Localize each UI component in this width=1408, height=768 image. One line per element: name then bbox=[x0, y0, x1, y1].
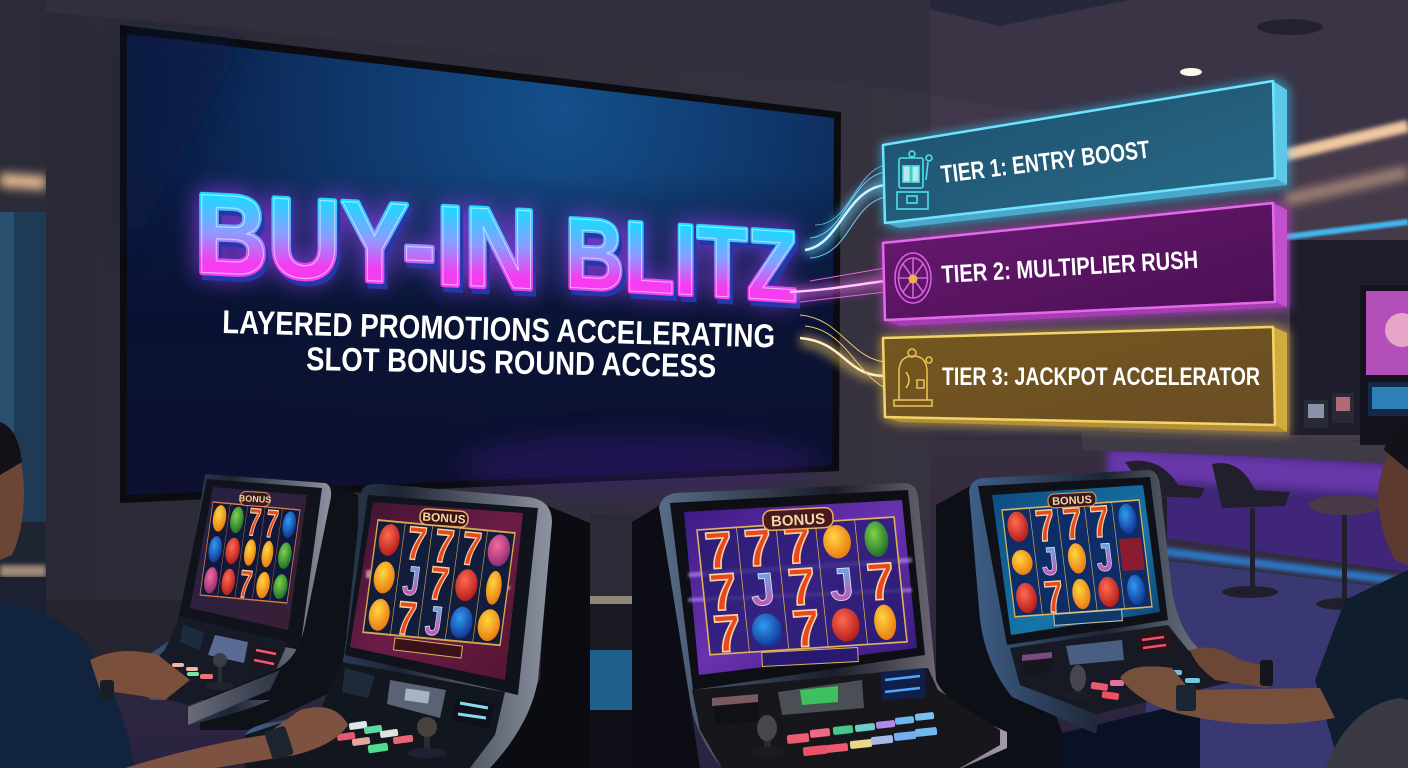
reels 4: J bbox=[1094, 535, 1116, 580]
slot machine 3 bbox=[632, 483, 1007, 768]
title face: BUY-IN bbox=[195, 170, 537, 313]
control panel 2 bbox=[245, 662, 505, 768]
reels 2: 7 bbox=[431, 519, 457, 573]
icon: jackpot machine bbox=[894, 349, 932, 406]
reels 4: 7 bbox=[1042, 572, 1067, 623]
reels 3: J bbox=[748, 564, 777, 616]
icon: wheel bbox=[895, 253, 931, 303]
stream: tier 1 cyan bbox=[805, 165, 885, 258]
reels 2: J bbox=[422, 597, 445, 645]
subtitle bbox=[222, 303, 776, 384]
stools bbox=[1125, 461, 1381, 610]
subtitle: LAYERED PROMOTIONS ACCELERATING bbox=[222, 303, 776, 354]
bonus plate 2: BONUS bbox=[422, 510, 466, 526]
footer plate 3 bbox=[762, 647, 858, 667]
panel: tier 3 jackpot accelerator bbox=[880, 324, 1290, 435]
left edge wall bbox=[0, 0, 46, 637]
reels 4: J bbox=[1039, 539, 1061, 584]
title inner outline bbox=[195, 170, 797, 323]
reels 1: 7 bbox=[236, 561, 255, 607]
slot machine 1 bbox=[125, 474, 358, 730]
reels 4: 7 bbox=[1033, 501, 1058, 552]
panel: tier 1 entry boost bbox=[880, 78, 1290, 231]
stream: tier 2 magenta bbox=[790, 268, 885, 302]
icon: slot machine bbox=[897, 151, 932, 209]
title face: BLITZ bbox=[565, 197, 797, 323]
floor bbox=[1140, 560, 1408, 768]
title glow: BUY-IN bbox=[195, 170, 537, 313]
title inner outline: BLITZ bbox=[565, 197, 797, 323]
speed streaks 3 bbox=[688, 560, 912, 600]
left player bbox=[0, 422, 348, 768]
footer plate 2 bbox=[394, 638, 462, 658]
reels 3: 7 bbox=[711, 603, 744, 664]
label: tier 3: TIER 3: JACKPOT ACCELERATOR bbox=[942, 363, 1260, 391]
reels 2: 7 bbox=[458, 522, 484, 576]
bar area bbox=[1082, 285, 1408, 768]
reels 1: 7 bbox=[245, 499, 263, 545]
panel: tier 2 multiplier rush bbox=[880, 200, 1290, 329]
reels 3: 7 bbox=[707, 562, 740, 622]
wall display screen bbox=[120, 25, 841, 503]
reels 1: 7 bbox=[263, 501, 281, 546]
footer plate 4 bbox=[1054, 610, 1122, 625]
title extrusion bbox=[198, 175, 800, 328]
reels 3: 7 bbox=[742, 518, 775, 578]
ceiling and right wall bbox=[890, 0, 1408, 440]
speed streaks 2 bbox=[366, 574, 510, 588]
control panel 1 bbox=[125, 616, 288, 705]
right player bbox=[1120, 420, 1408, 768]
title inner outline: BUY-IN bbox=[195, 170, 537, 313]
reels 2: 7 bbox=[426, 557, 452, 611]
title face bbox=[195, 170, 797, 323]
control panel 4 bbox=[1010, 625, 1240, 714]
title extrusion: BLITZ bbox=[568, 202, 800, 328]
title glow: BLITZ bbox=[565, 197, 797, 323]
stream: tier 3 gold bbox=[800, 315, 885, 388]
title: BUY-IN BLITZ bbox=[195, 170, 800, 328]
reels 3: 7 bbox=[790, 598, 823, 658]
reels 3 bbox=[696, 509, 908, 664]
reels 3: J bbox=[827, 559, 856, 611]
control panel 3 bbox=[692, 668, 1000, 768]
energy streams bbox=[790, 165, 885, 388]
reels 3: 7 bbox=[864, 551, 898, 612]
reels 2 bbox=[362, 514, 516, 654]
reels 2: J bbox=[400, 557, 423, 605]
bonus plate 4: BONUS bbox=[1052, 494, 1092, 508]
feature wall bbox=[46, 0, 930, 620]
subtitle: SLOT BONUS ROUND ACCESS bbox=[306, 340, 716, 384]
reels 4 bbox=[1001, 495, 1153, 625]
lower wall ledge bbox=[46, 600, 196, 660]
reels 4: 7 bbox=[1088, 497, 1113, 548]
label: tier 2: TIER 2: MULTIPLIER RUSH bbox=[941, 246, 1199, 289]
label: tier 1: TIER 1: ENTRY BOOST bbox=[939, 136, 1151, 189]
title extrusion: BUY-IN bbox=[198, 175, 540, 318]
bonus plate 3 bbox=[763, 507, 833, 531]
title glow bbox=[195, 170, 797, 323]
slot machine 4 bbox=[936, 470, 1240, 768]
bonus plate 1: BONUS bbox=[239, 493, 271, 505]
reels 2: 7 bbox=[403, 517, 429, 571]
kiosk bbox=[1304, 285, 1408, 445]
reels 3: 7 bbox=[785, 557, 819, 617]
bonus plate 3: BONUS bbox=[771, 511, 826, 530]
reels 1 bbox=[199, 496, 301, 610]
reels 4: 7 bbox=[1060, 499, 1085, 550]
reels 3: 7 bbox=[781, 515, 814, 575]
slot machine 2 bbox=[245, 484, 590, 768]
reels 2: 7 bbox=[393, 591, 419, 645]
reels 3: 7 bbox=[702, 520, 736, 580]
